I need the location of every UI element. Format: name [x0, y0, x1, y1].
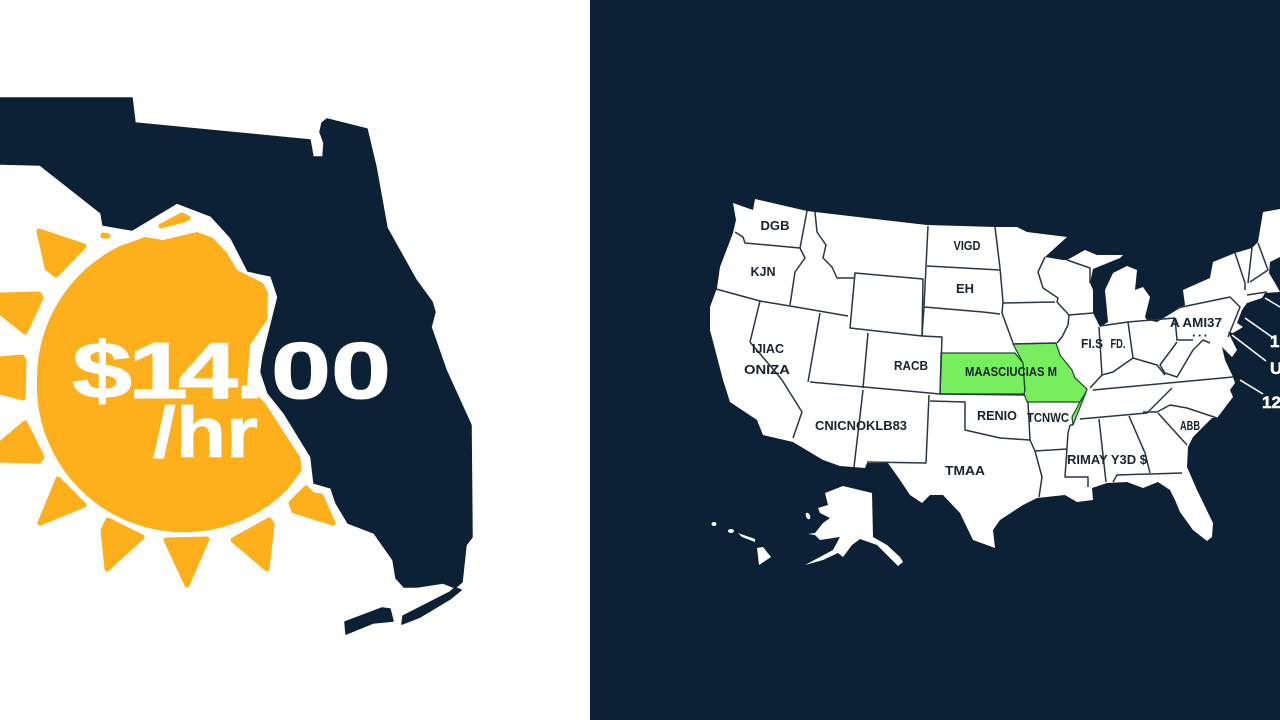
state shape: Florida — [0, 98, 472, 634]
state labels — [744, 218, 1222, 478]
callout labels: northeast states: 1 — [1270, 332, 1279, 351]
state labels: MAASCIUCIAS M — [965, 364, 1057, 379]
state labels: CNICNOKLB83 — [815, 418, 907, 433]
wage unit: /hr — [153, 394, 258, 473]
state labels: ONIZA — [744, 362, 791, 377]
state labels: VIGD — [954, 238, 980, 253]
panel: Florida — [0, 0, 590, 720]
state labels: RACB — [894, 358, 928, 373]
state labels: RENIO — [977, 408, 1017, 423]
highlighted states — [940, 343, 1087, 425]
state labels: A AMI37 — [1170, 315, 1222, 330]
sun disc — [37, 232, 302, 532]
map: Alaska — [805, 486, 903, 566]
state labels: FD. — [1110, 336, 1126, 351]
state labels: · · · — [1192, 328, 1208, 343]
state labels: RIMAY Y3D $ — [1067, 452, 1148, 467]
state labels: ABB — [1180, 418, 1200, 433]
panel: US map — [590, 0, 1280, 720]
state labels: TMAA — [945, 463, 986, 478]
state labels: TCNWC — [1027, 410, 1070, 425]
icon: sun — [0, 215, 333, 585]
wage figure: $14.00 — [72, 326, 391, 416]
state borders — [716, 211, 1268, 497]
state labels: EH — [956, 281, 974, 296]
state labels: IJIAC — [752, 341, 785, 356]
map: contiguous United States — [710, 199, 1280, 548]
state labels: DGB — [760, 218, 790, 233]
callout labels: northeast states — [1262, 332, 1280, 412]
state labels: KJN — [750, 264, 776, 279]
callout lines: northeast states — [1232, 298, 1280, 394]
sun rays — [0, 215, 333, 585]
map: Hawaii — [712, 512, 811, 565]
state labels: FI.S — [1081, 336, 1103, 351]
